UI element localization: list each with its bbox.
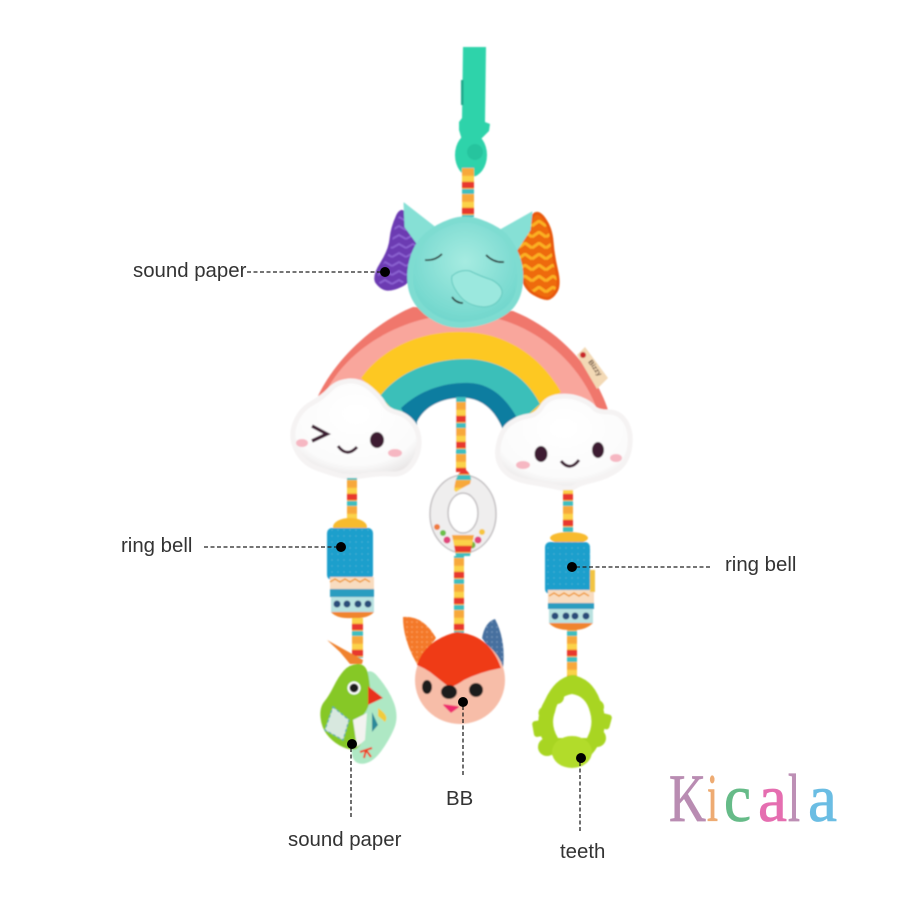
callout: sound paper bottom [288, 739, 402, 851]
logo: Kicala: K [669, 760, 706, 836]
left ring bell [327, 518, 374, 618]
callout: ring bell left: ring bell [121, 535, 192, 557]
callout: sound paper left: sound paper [133, 260, 247, 282]
teether [532, 675, 613, 768]
logo: Kicala: l [788, 760, 800, 836]
right cloud [498, 396, 630, 489]
callout: ring bell left [121, 535, 346, 557]
rattle ring [430, 470, 496, 556]
right ring bell [545, 532, 595, 630]
left cloud [293, 381, 419, 477]
logo: Kicala: a [808, 760, 837, 836]
top ribbon [462, 167, 474, 217]
callout: sound paper left [133, 260, 390, 282]
brand tag: Bizzy [586, 359, 603, 378]
hanging clip [455, 47, 490, 177]
logo: Kicala [669, 760, 837, 836]
logo: Kicala: a [758, 760, 787, 836]
center ribbon [456, 397, 466, 472]
callout: BB: BB [446, 788, 473, 810]
brand tag [577, 347, 608, 389]
right ribbon upper [563, 490, 573, 532]
elephant ear: purple sound paper [376, 212, 417, 289]
elephant ear: orange [518, 213, 558, 299]
callout: teeth: teeth [560, 841, 605, 863]
elephant head [404, 203, 532, 325]
callout: teeth [560, 753, 605, 863]
callout: sound paper bottom: sound paper [288, 829, 402, 851]
logo: Kicala: i [707, 760, 718, 836]
fox head [403, 617, 505, 724]
left ribbon upper [347, 478, 357, 520]
logo: Kicala: c [724, 760, 751, 836]
bird [322, 640, 394, 762]
rainbow [318, 307, 608, 450]
callout: ring bell right [567, 554, 796, 576]
right ribbon lower [567, 630, 577, 680]
center ribbon lower [454, 556, 464, 634]
callout: BB [446, 697, 473, 810]
left ribbon lower [352, 618, 363, 658]
toy illustration [293, 47, 630, 768]
callout: ring bell right: ring bell [725, 554, 796, 576]
